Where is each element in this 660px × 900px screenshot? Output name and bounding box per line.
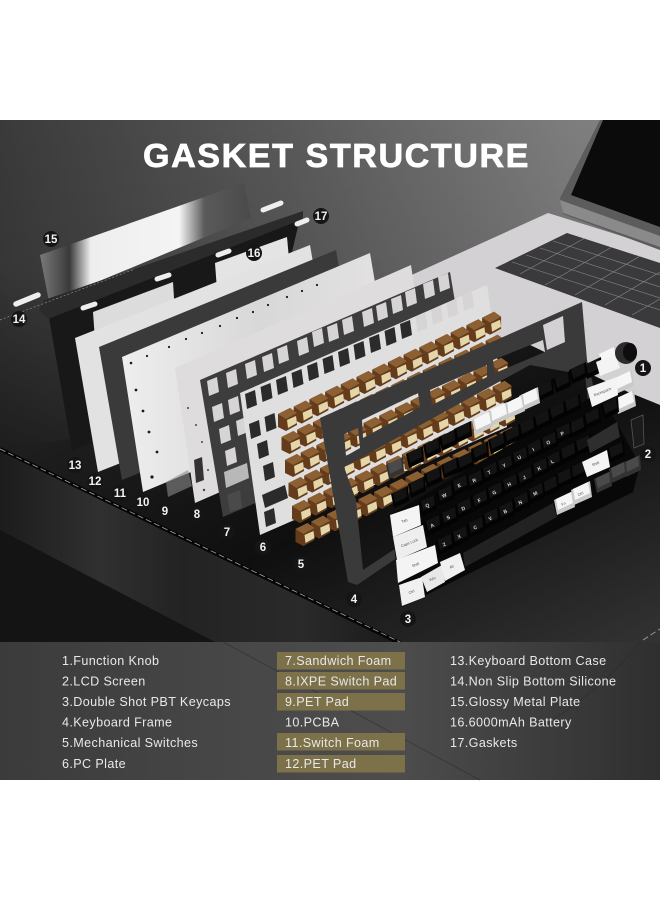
- legend column 1: 6.PC Plate: [62, 757, 126, 771]
- part 3: double shot PBT keycaps: F: [477, 498, 482, 504]
- part 3: double shot PBT keycaps: U: [517, 454, 523, 462]
- dark desk corner: [0, 530, 215, 642]
- stitched mat edge: [0, 449, 660, 643]
- part 8: IXPE switch pad: [175, 265, 431, 503]
- desk mat: [0, 345, 660, 645]
- legend column 1: 2.LCD Screen: [62, 674, 146, 688]
- legend column 1: 4.Keyboard Frame: [62, 716, 172, 730]
- part 3: double shot PBT keycaps: R: [472, 477, 478, 485]
- scene background wall: [0, 120, 660, 645]
- part 3: double shot PBT keycaps: K: [537, 465, 543, 473]
- part 13: keyboard bottom case: [48, 218, 300, 450]
- part 7: sandwich foam: [200, 272, 473, 517]
- part 4: keyboard frame: [320, 302, 600, 585]
- legend column 1: 1.Function Knob: [62, 654, 159, 668]
- number badges: 6: [260, 542, 266, 554]
- number badges: 8: [194, 509, 201, 521]
- part 14: non slip silicone bar: [0, 211, 303, 320]
- part 12: PET pad: [75, 245, 333, 472]
- part 3: double shot PBT keycaps: Alt: [449, 564, 455, 570]
- part 3: double shot PBT keycaps: Ctrl: [408, 589, 415, 595]
- title: GASKET STRUCTURE: [143, 137, 530, 174]
- part 3: double shot PBT keycaps: E: [457, 482, 463, 490]
- legend column 3: 13.Keyboard Bottom Case: [450, 654, 606, 668]
- part 3: double shot PBT keycaps: I: [532, 447, 536, 453]
- part 3: double shot PBT keycaps: Shift: [411, 561, 421, 568]
- part 3: double shot PBT keycaps: O: [546, 440, 552, 447]
- part 3: double shot PBT keycaps: G: [492, 490, 498, 497]
- part 3: double shot PBT keycaps: A: [430, 522, 436, 530]
- number badges: [11, 208, 656, 627]
- legend column 1: [62, 654, 231, 771]
- legend column 2: [285, 654, 397, 771]
- part 2: LCD screen: [631, 415, 644, 448]
- part 3: double shot PBT keycaps: P: [560, 430, 566, 438]
- number badges: 1: [640, 363, 647, 375]
- number badges: 9: [162, 506, 168, 518]
- legend column 2: 10.PCBA: [285, 716, 340, 730]
- part 3: double shot PBT keycaps: L: [550, 459, 555, 465]
- part 3: double shot PBT keycaps: Ctrl: [577, 491, 584, 497]
- part 3: double shot PBT keycaps: N: [518, 499, 524, 507]
- part 16: 6000mAh battery: [93, 237, 290, 340]
- number badges: 7: [224, 527, 230, 539]
- number badges: 13: [69, 460, 81, 472]
- legend column 3: 14.Non Slip Bottom Silicone: [450, 674, 616, 688]
- number badges: 12: [89, 476, 101, 488]
- part 3: double shot PBT keycaps: Win: [429, 576, 436, 582]
- legend column 2: 9.PET Pad: [285, 695, 349, 709]
- part 3: double shot PBT keycaps: [386, 346, 641, 606]
- number badges: 10: [137, 497, 149, 509]
- part 3: double shot PBT keycaps: T: [487, 470, 492, 476]
- legend panel: [0, 642, 660, 780]
- legend column 2: 7.Sandwich Foam: [285, 654, 392, 668]
- part 9: translucent PET pad: [166, 470, 192, 497]
- number badges: 16: [248, 248, 260, 260]
- legend column 3: 15.Glossy Metal Plate: [450, 695, 580, 709]
- legend column 2: 12.PET Pad: [285, 757, 356, 771]
- part 10: PCBA: [122, 253, 393, 492]
- part 1: function knob: [596, 342, 637, 376]
- part 3: double shot PBT keycaps: Z: [442, 542, 447, 548]
- number badges: 15: [45, 234, 58, 246]
- number badges: 11: [114, 488, 127, 500]
- legend column 2: 8.IXPE Switch Pad: [285, 674, 397, 688]
- part 3: double shot PBT keycaps: D: [461, 505, 467, 513]
- part 11: switch foam: [99, 250, 359, 480]
- part 3: double shot PBT keycaps: Fn: [561, 501, 566, 507]
- part 3: double shot PBT keycaps: Caps Lock: [401, 538, 419, 548]
- part 3: double shot PBT keycaps: M: [532, 490, 539, 498]
- part 3: double shot PBT keycaps: W: [441, 492, 448, 500]
- legend column 3: [450, 654, 616, 750]
- part 3: double shot PBT keycaps: Y: [502, 462, 508, 470]
- part 3: double shot PBT keycaps: H: [507, 481, 513, 489]
- part 3: double shot PBT keycaps: J: [522, 475, 527, 481]
- number badges: 14: [13, 314, 26, 326]
- part 3: double shot PBT keycaps: V: [488, 515, 494, 523]
- part 17: gaskets: [16, 203, 307, 308]
- number badges: 5: [298, 559, 305, 571]
- number badges: 2: [645, 449, 651, 461]
- part 3: double shot PBT keycaps: S: [446, 514, 452, 522]
- legend column 1: 5.Mechanical Switches: [62, 736, 198, 750]
- part 3: double shot PBT keycaps: Q: [425, 503, 431, 510]
- part 3: double shot PBT keycaps: Tab: [401, 518, 408, 524]
- part 3: double shot PBT keycaps: C: [473, 524, 479, 532]
- legend highlight boxes: [277, 652, 405, 772]
- legend column 3: 16.6000mAh Battery: [450, 716, 572, 730]
- legend column 3: 17.Gaskets: [450, 736, 518, 750]
- part 3: double shot PBT keycaps: Backspace: [593, 387, 612, 397]
- part 15: glossy metal plate: [40, 183, 251, 302]
- desk surface below mat: [0, 448, 400, 642]
- keyboard base: [390, 392, 640, 607]
- number badges: 4: [351, 594, 358, 606]
- part 6: PC plate: [240, 285, 507, 535]
- part 3: double shot PBT keycaps: Shift: [591, 460, 601, 467]
- number badges: 3: [405, 614, 411, 626]
- legend column 1: 3.Double Shot PBT Keycaps: [62, 695, 231, 709]
- part 3: double shot PBT keycaps: X: [457, 533, 463, 541]
- legend column 2: 11.Switch Foam: [285, 736, 380, 750]
- part 3: double shot PBT keycaps: B: [503, 508, 509, 516]
- number badges: 17: [315, 211, 327, 223]
- part 5: mechanical switches: [278, 312, 519, 546]
- laptop: [400, 120, 660, 405]
